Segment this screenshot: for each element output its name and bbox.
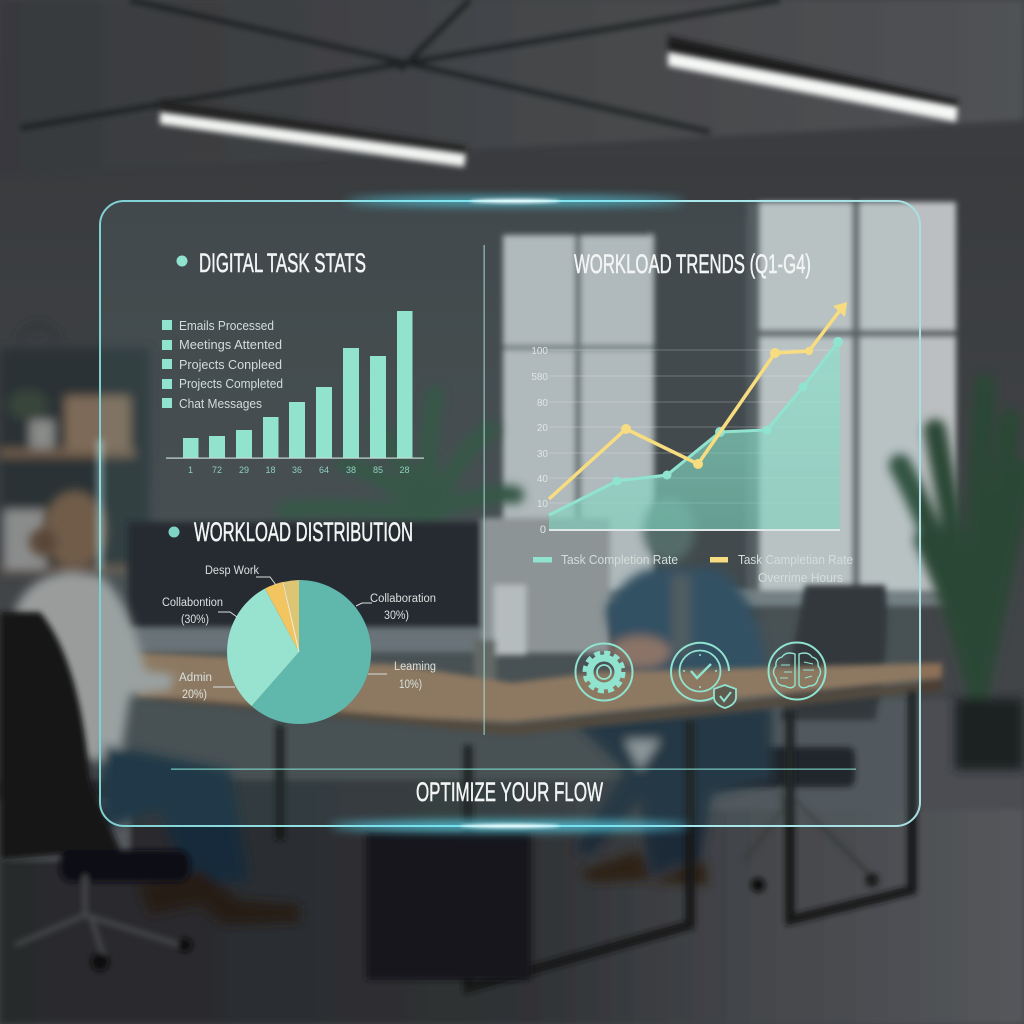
pie labels and leaders — [162, 565, 436, 701]
left edge glow — [98, 440, 102, 570]
pie labels and leaders: 30%) — [384, 610, 409, 622]
legend: Emails Processed — [179, 319, 274, 333]
legend: Projects Completed — [179, 377, 283, 391]
heading: WORKLOAD TRENDS (Q1-G4) — [574, 249, 811, 279]
line chart: 80 — [537, 398, 548, 409]
top glow — [345, 197, 685, 205]
shelf — [0, 325, 150, 573]
bar chart: 18 — [265, 465, 276, 475]
pie labels and leaders: 10%) — [399, 679, 422, 691]
section: digital task stats — [162, 248, 424, 475]
woman — [15, 490, 300, 925]
pie labels and leaders: Admin — [179, 672, 212, 684]
icon: brain — [768, 642, 826, 700]
bar chart: 64 — [319, 465, 329, 475]
bar chart: 1 — [188, 465, 193, 475]
pie labels and leaders: (30%) — [181, 614, 209, 626]
section: workload trends — [531, 249, 853, 585]
bar chart: 38 — [346, 465, 356, 475]
icon: gear — [576, 644, 632, 700]
closing tagline: OPTIMIZE YOUR FLOW — [416, 777, 603, 807]
line chart: 100 — [531, 346, 548, 357]
monitors — [122, 518, 610, 695]
bottom glow — [330, 821, 690, 831]
heading: WORKLOAD DISTRIBUTION — [194, 517, 413, 547]
line chart: 10 — [537, 499, 548, 510]
pie chart — [227, 580, 371, 724]
line chart: 40 — [537, 474, 548, 485]
ceiling — [0, 0, 1024, 175]
legend — [162, 319, 283, 411]
line chart: 580 — [531, 372, 548, 383]
bar chart: 72 — [212, 465, 222, 475]
bar chart: 28 — [399, 465, 410, 475]
bottom rule — [171, 768, 856, 770]
panel border — [100, 201, 920, 826]
bar chart — [166, 311, 424, 475]
line chart: 0 — [540, 524, 546, 536]
icon row — [576, 642, 826, 708]
bar chart: 85 — [373, 465, 383, 475]
bar chart: 36 — [292, 465, 302, 475]
bullet — [176, 256, 188, 266]
legend: Meetings Attented — [179, 338, 282, 352]
ceiling light left — [160, 100, 466, 167]
pie labels and leaders: 20%) — [182, 689, 207, 701]
pie labels and leaders: Collaboration — [370, 593, 436, 605]
ceiling light right — [668, 36, 958, 122]
chair right — [712, 585, 887, 892]
floor — [0, 700, 1024, 1024]
plant right — [900, 385, 1024, 770]
heading: DIGITAL TASK STATS — [199, 248, 366, 278]
desk — [125, 652, 942, 988]
man — [572, 498, 772, 885]
line chart: 30 — [537, 449, 548, 460]
plant center — [285, 395, 515, 515]
legend: Projects Conpleed — [179, 358, 282, 372]
legend — [533, 553, 853, 585]
line chart — [531, 302, 847, 536]
chair left — [0, 612, 192, 971]
legend: Overrime Hours — [758, 571, 843, 585]
section: workload distribution — [162, 517, 436, 724]
pie labels and leaders: Collabontion — [162, 597, 223, 609]
column divider — [484, 245, 485, 735]
legend: Chat Messages — [179, 397, 262, 411]
legend: Task Campletian Rate — [738, 553, 853, 567]
line chart: 20 — [537, 423, 548, 434]
legend: Task Completion Rate — [561, 553, 678, 567]
windows — [500, 202, 970, 620]
bullet — [168, 526, 180, 538]
bar chart: 29 — [239, 465, 249, 475]
icon: clock with shield — [671, 643, 736, 708]
computer tower — [366, 832, 531, 980]
panel tint — [100, 201, 920, 826]
glass panel — [98, 197, 920, 831]
pie labels and leaders: Desp Work — [205, 565, 259, 577]
pie labels and leaders: Leaming — [394, 661, 436, 673]
